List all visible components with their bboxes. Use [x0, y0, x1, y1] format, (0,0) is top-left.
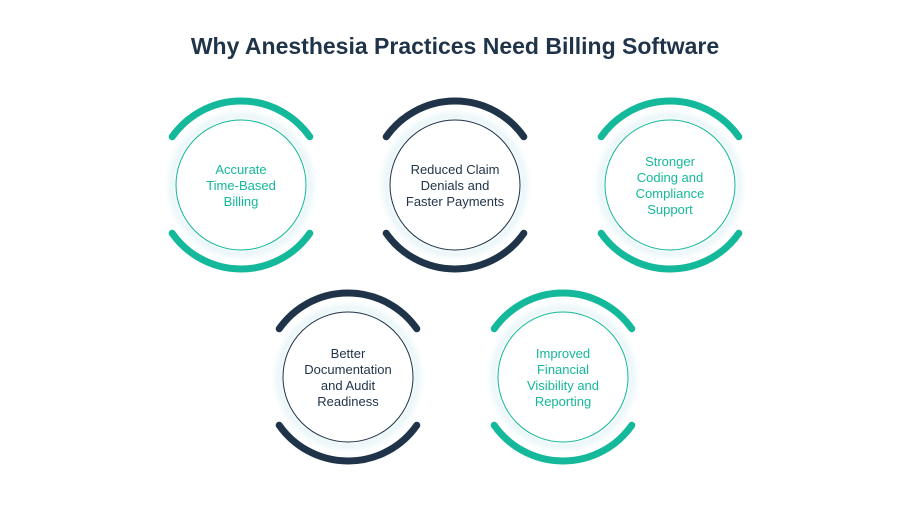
- circle: improved financial visibility: Visibility and: [527, 378, 599, 393]
- title: Why Anesthesia Practices Need Billing Software: [191, 33, 719, 59]
- circle: improved financial visibility: Improved: [536, 346, 590, 361]
- circle: accurate time-based billing: [172, 101, 310, 269]
- circle: better documentation: Documentation: [304, 362, 392, 377]
- circle: better documentation: Better: [331, 346, 366, 361]
- circle: stronger coding: Stronger: [645, 154, 696, 169]
- circle: better documentation: [279, 293, 417, 461]
- circle: better documentation: and Audit: [321, 378, 375, 393]
- circle: stronger coding: Coding and: [637, 170, 703, 185]
- circle: reduced claim denials: Denials and: [421, 178, 489, 193]
- circle: accurate time-based billing: Billing: [224, 194, 258, 209]
- circle: reduced claim denials: Reduced Claim: [411, 162, 499, 177]
- circle: improved financial visibility: Reporting: [535, 394, 591, 409]
- circle: better documentation: Readiness: [317, 394, 379, 409]
- circle: accurate time-based billing: Time-Based: [206, 178, 276, 193]
- circle: reduced claim denials: [386, 101, 524, 269]
- circle: stronger coding: Compliance: [636, 186, 704, 201]
- circle: stronger coding: Support: [647, 202, 693, 217]
- circle: stronger coding: [601, 101, 739, 269]
- circle: accurate time-based billing: Accurate: [215, 162, 267, 177]
- circle: improved financial visibility: [494, 293, 632, 461]
- circle: improved financial visibility: Financial: [537, 362, 589, 377]
- circle: reduced claim denials: Faster Payments: [406, 194, 505, 209]
